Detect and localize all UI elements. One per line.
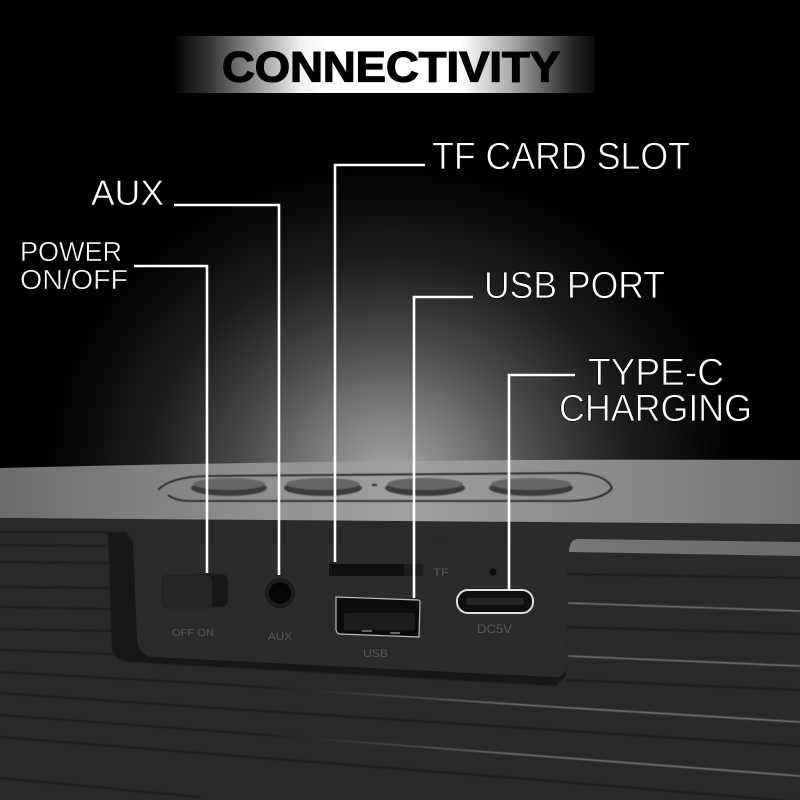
callout: type-c charging: CHARGING (559, 388, 752, 430)
right grille highlights (568, 603, 800, 666)
switch label: OFF ON (172, 627, 214, 639)
callout: usb port (414, 265, 665, 598)
control button strip (158, 473, 612, 501)
lower grille dark ridges (0, 574, 800, 800)
callout: type-c charging: TYPE-C (588, 352, 724, 394)
callout: aux (91, 174, 279, 575)
background glow (0, 150, 800, 550)
led indicator (490, 568, 496, 576)
callout: aux: AUX (91, 174, 164, 213)
slot: tf card (329, 563, 449, 579)
callout: type-c charging (509, 352, 752, 590)
port: usb (336, 597, 420, 660)
title: CONNECTIVITY (222, 44, 560, 92)
callout: usb port: USB PORT (484, 265, 665, 307)
jack: aux (264, 577, 296, 643)
right bevel highlight (569, 539, 800, 556)
title banner (175, 36, 595, 93)
lower grille fading ridges (0, 672, 800, 776)
usb label: USB (363, 648, 388, 660)
callout: power on/off (20, 236, 207, 573)
left grille ridges (0, 532, 115, 654)
speaker front face (0, 518, 800, 800)
dc5v label: DC5V (477, 622, 512, 636)
port: type-c (457, 590, 533, 636)
speaker body (0, 460, 800, 800)
callout: tf card slot (335, 136, 690, 562)
aux label: AUX (268, 631, 293, 643)
callout: power on/off: ON/OFF (20, 264, 128, 295)
speaker top surface (0, 460, 800, 526)
callout: power on/off: POWER (20, 236, 122, 267)
callout: tf card slot: TF CARD SLOT (432, 136, 690, 178)
tf label: TF (433, 567, 449, 579)
port panel (133, 541, 567, 677)
port recess shadow (108, 532, 566, 686)
switch: power (162, 574, 228, 639)
